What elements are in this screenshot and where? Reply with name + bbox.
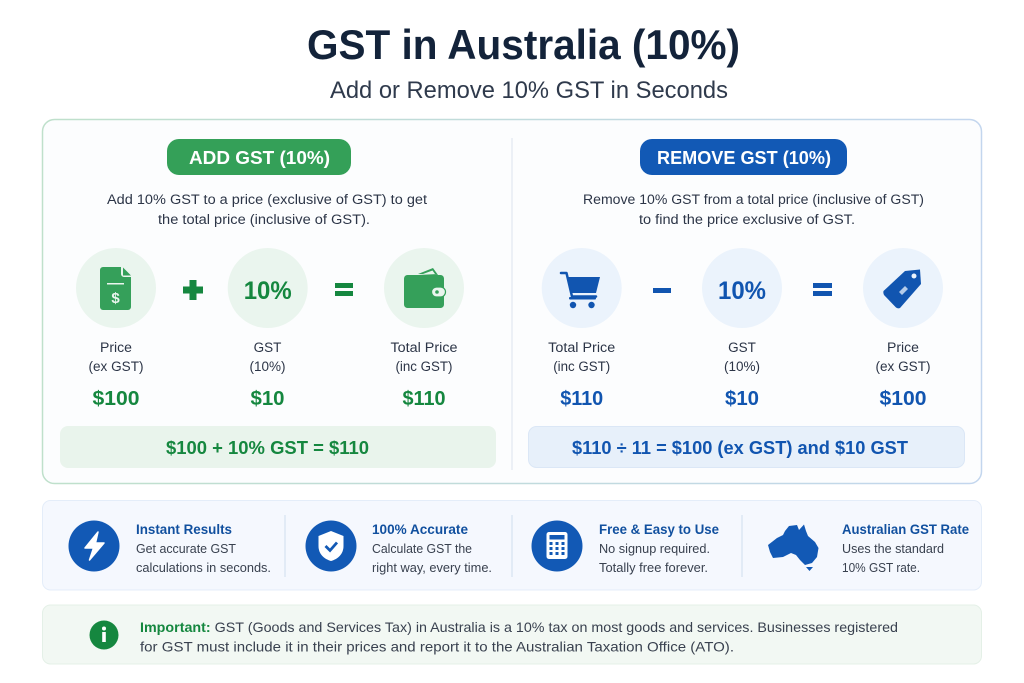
feature: free and easy: No signup required. bbox=[599, 542, 710, 556]
values: remove GST bbox=[560, 388, 926, 410]
important text: Important: GST (Goods and Services Tax) in Australia is a 10% tax on most goods and services. Businesses registered bbox=[140, 619, 898, 635]
remove GST description: to find the price exclusive of GST. bbox=[639, 212, 855, 227]
minus operator bbox=[653, 288, 671, 293]
feature: free and easy: Totally free forever. bbox=[599, 561, 708, 575]
plus operator bbox=[183, 280, 203, 300]
important text bbox=[140, 619, 898, 654]
GST percent circle bbox=[228, 248, 308, 328]
feature: instant results bbox=[68, 520, 271, 575]
feature: instant results: Get accurate GST bbox=[136, 542, 236, 556]
labels: remove GST bbox=[548, 340, 930, 374]
icon: lightning bolt bbox=[68, 520, 120, 572]
GST percent circle bbox=[702, 248, 782, 328]
values: add GST: $100 bbox=[92, 388, 140, 410]
panel: remove GST bbox=[528, 139, 964, 468]
panel: features bbox=[42, 500, 982, 590]
GST percent circle: 10% bbox=[244, 277, 292, 305]
icon: map of Australia bbox=[768, 524, 818, 571]
feature: Australian rate: 10% GST rate. bbox=[842, 561, 920, 575]
values: remove GST: $100 bbox=[880, 388, 926, 410]
labels: add GST: (inc GST) bbox=[396, 359, 452, 374]
labels: add GST: Total Price bbox=[390, 340, 458, 355]
icon: price tag bbox=[863, 248, 943, 328]
remove GST formula bbox=[528, 426, 964, 468]
add GST description bbox=[107, 192, 427, 227]
labels: add GST: GST bbox=[254, 340, 281, 355]
title: GST in Australia (10%) bbox=[307, 21, 740, 68]
labels: add GST: Price bbox=[100, 340, 132, 355]
icon: price document bbox=[76, 248, 156, 328]
remove GST formula: $110 ÷ 11 = $100 (ex GST) and $10 GST bbox=[572, 438, 908, 458]
values: add GST: $10 bbox=[250, 388, 284, 410]
feature: Australian rate: Australian GST Rate bbox=[842, 522, 969, 537]
remove GST badge bbox=[640, 139, 847, 175]
labels: add GST: (10%) bbox=[249, 359, 286, 374]
feature: instant results: Instant Results bbox=[136, 522, 232, 537]
GST percent circle: 10% bbox=[718, 277, 766, 305]
remove GST badge: REMOVE GST (10%) bbox=[657, 148, 831, 168]
feature: Australian rate: Uses the standard bbox=[842, 542, 944, 556]
feature: Australian rate bbox=[768, 522, 969, 575]
icon: price document: $ bbox=[111, 290, 120, 307]
icon: calculator bbox=[532, 520, 582, 572]
feature: accurate: Calculate GST the bbox=[372, 542, 472, 556]
values: add GST: $110 bbox=[402, 388, 446, 410]
icon: info bbox=[90, 620, 118, 650]
add GST description: the total price (inclusive of GST). bbox=[158, 212, 370, 227]
feature: accurate: right way, every time. bbox=[372, 561, 492, 575]
labels: add GST: (ex GST) bbox=[88, 359, 144, 374]
add GST description: Add 10% GST to a price (exclusive of GST) to get bbox=[107, 192, 427, 207]
panel: important note bbox=[42, 605, 982, 664]
labels: remove GST: GST bbox=[728, 340, 756, 355]
icon: wallet bbox=[384, 248, 464, 328]
add GST badge: ADD GST (10%) bbox=[189, 148, 330, 168]
values: remove GST: $10 bbox=[725, 388, 759, 410]
labels: add GST bbox=[88, 340, 458, 374]
add GST badge bbox=[167, 139, 351, 175]
add GST formula: $100 + 10% GST = $110 bbox=[166, 438, 369, 458]
labels: remove GST: Total Price bbox=[548, 340, 615, 355]
labels: remove GST: (inc GST) bbox=[553, 359, 610, 374]
values: remove GST: $110 bbox=[560, 388, 603, 410]
labels: remove GST: Price bbox=[887, 340, 919, 355]
panel: calculators bbox=[42, 120, 982, 484]
feature: instant results: calculations in seconds. bbox=[136, 561, 271, 575]
important text: for GST must include it in their prices and report it to the Australian Taxation Office (ATO). bbox=[140, 638, 734, 654]
feature: accurate: 100% Accurate bbox=[372, 522, 468, 537]
values: add GST bbox=[92, 388, 446, 410]
feature: free and easy bbox=[532, 520, 719, 575]
subtitle: Add or Remove 10% GST in Seconds bbox=[330, 77, 728, 104]
equals operator bbox=[335, 283, 353, 296]
icon: shield check bbox=[306, 520, 356, 572]
panel: add GST bbox=[60, 139, 496, 468]
labels: remove GST: (10%) bbox=[724, 359, 760, 374]
feature: accurate bbox=[306, 520, 492, 575]
add GST formula bbox=[60, 426, 496, 468]
remove GST description bbox=[583, 192, 924, 227]
remove GST description: Remove 10% GST from a total price (inclusive of GST) bbox=[583, 192, 924, 207]
equals operator bbox=[813, 283, 832, 296]
icon: shopping cart bbox=[542, 248, 622, 328]
feature: free and easy: Free & Easy to Use bbox=[599, 522, 719, 537]
labels: remove GST: (ex GST) bbox=[876, 359, 930, 374]
